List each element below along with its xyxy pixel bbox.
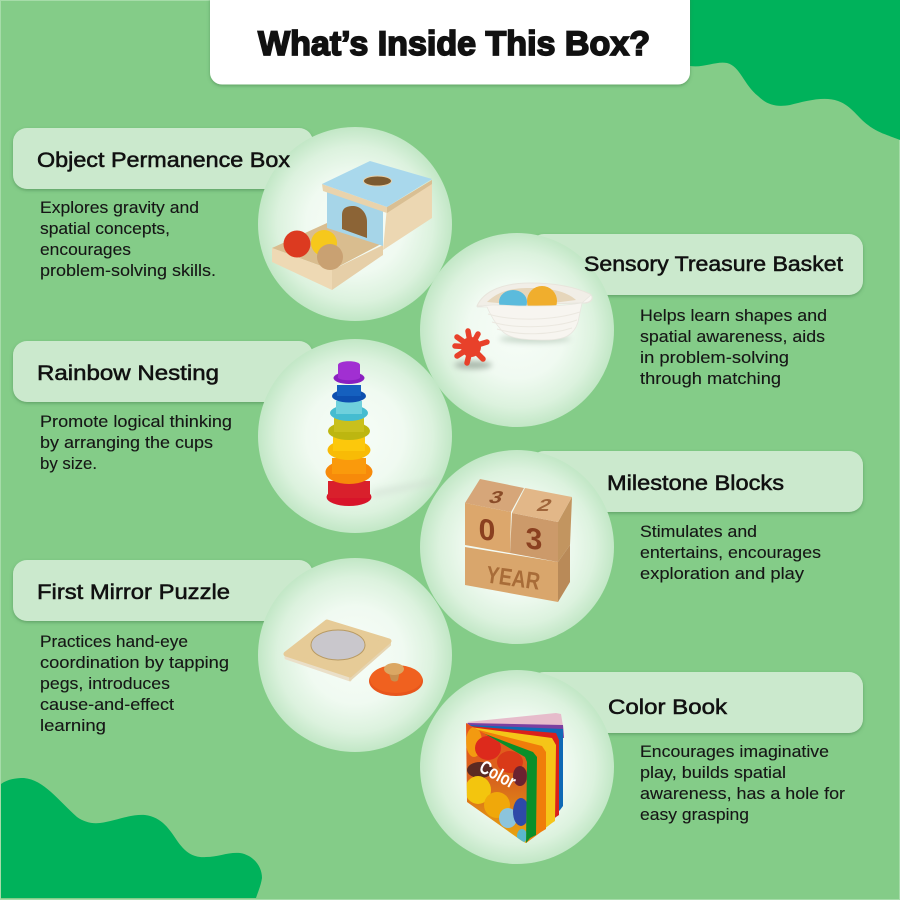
description: Color Book: awareness, has a hole for — [640, 785, 846, 803]
description: Sensory Treasure Basket: in problem-solving — [640, 349, 789, 367]
panel: Milestone Blocks — [420, 450, 863, 644]
description: Sensory Treasure Basket: spatial awareness, aids — [640, 328, 825, 346]
heading: Rainbow Nesting: Rainbow Nesting — [37, 361, 219, 385]
description: Color Book: play, builds spatial — [640, 764, 786, 782]
description: First Mirror Puzzle — [40, 633, 229, 735]
description: Object Permanence Box — [40, 199, 216, 280]
icon: wooden milestone blocks: 0 — [479, 513, 495, 548]
panel: Sensory Treasure Basket — [420, 233, 863, 427]
icon: rope basket with sensory balls — [454, 283, 592, 369]
panel: Rainbow Nesting — [13, 339, 452, 533]
description: Object Permanence Box: Explores gravity and — [40, 199, 199, 217]
description: Rainbow Nesting: by size. — [40, 455, 97, 473]
heading: Color Book: Color Book — [608, 695, 727, 719]
description: Object Permanence Box: problem-solving skills. — [40, 262, 216, 280]
description: Sensory Treasure Basket — [640, 307, 827, 388]
heading: Milestone Blocks: Milestone Blocks — [607, 471, 784, 495]
description: Milestone Blocks: entertains, encourages — [640, 544, 821, 562]
heading: First Mirror Puzzle: First Mirror Puzzle — [37, 580, 230, 604]
decorative blob: top right — [690, 0, 900, 140]
heading: Object Permanence Box: Object Permanence Box — [37, 148, 290, 172]
description: Object Permanence Box: spatial concepts, — [40, 220, 170, 238]
icon: wooden milestone blocks — [465, 479, 572, 602]
description: Rainbow Nesting: Promote logical thinking — [40, 413, 232, 431]
panel: Color Book — [420, 670, 863, 864]
description: First Mirror Puzzle: pegs, introduces — [40, 675, 170, 693]
icon: color board book: Color — [476, 757, 519, 793]
heading: Sensory Treasure Basket: Sensory Treasure Basket — [584, 252, 843, 276]
description: Color Book — [640, 743, 846, 824]
icon: wooden milestone blocks: YEAR — [484, 561, 542, 596]
icon: wooden milestone blocks: 2 — [534, 496, 555, 515]
description: Sensory Treasure Basket: through matching — [640, 370, 781, 388]
description: Rainbow Nesting — [40, 413, 232, 473]
description: Milestone Blocks: Stimulates and — [640, 523, 757, 541]
icon: color board book — [465, 713, 564, 843]
description: Rainbow Nesting: by arranging the cups — [40, 434, 213, 452]
icon: rainbow stacking cups — [326, 361, 438, 506]
description: Sensory Treasure Basket: Helps learn shapes and — [640, 307, 827, 325]
icon: mirror puzzle with peg — [286, 622, 423, 696]
icon: wooden milestone blocks: 3 — [526, 522, 542, 557]
panel: First Mirror Puzzle — [13, 558, 452, 752]
title: What’s Inside This Box? — [258, 25, 650, 63]
description: First Mirror Puzzle: coordination by tapping — [40, 654, 229, 672]
title banner — [210, 0, 690, 84]
description: Object Permanence Box: encourages — [40, 241, 131, 259]
icon: wooden milestone blocks: 3 — [486, 488, 506, 507]
icon: wooden permanence box with balls — [272, 161, 432, 290]
description: Milestone Blocks — [640, 523, 821, 583]
description: First Mirror Puzzle: Practices hand-eye — [40, 633, 188, 651]
description: First Mirror Puzzle: learning — [40, 717, 106, 735]
panel: Object Permanence Box — [13, 127, 452, 321]
description: First Mirror Puzzle: cause-and-effect — [40, 696, 174, 714]
description: Milestone Blocks: exploration and play — [640, 565, 805, 583]
decorative blob: bottom left — [1, 778, 262, 898]
description: Color Book: easy grasping — [640, 806, 749, 824]
description: Color Book: Encourages imaginative — [640, 743, 829, 761]
